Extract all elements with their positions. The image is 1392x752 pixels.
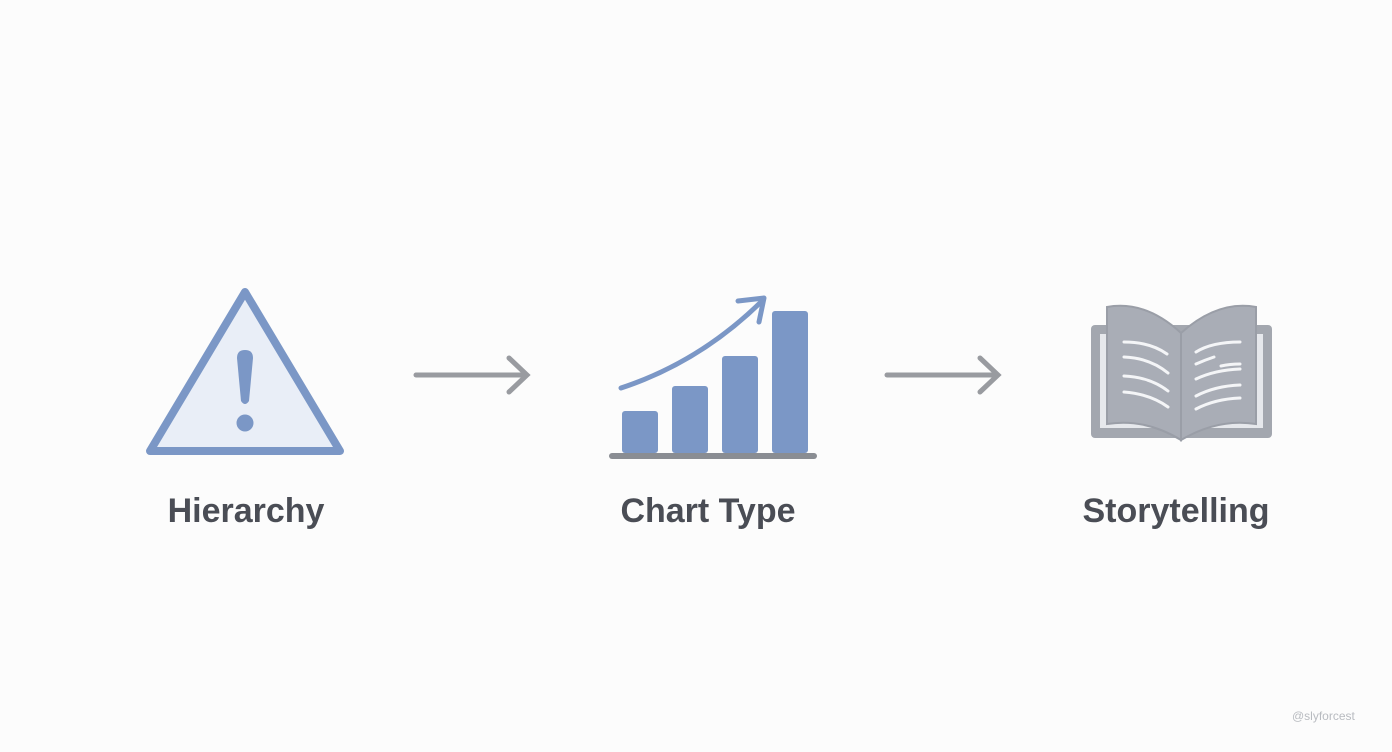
icon: warning triangle (150, 292, 340, 451)
arrow 2 (887, 358, 998, 392)
heading: Hierarchy: Hierarchy (168, 492, 325, 530)
icon: open book (1091, 306, 1272, 440)
watermark: @slyforcest (1292, 709, 1356, 723)
heading: Chart Type: Chart Type (620, 492, 796, 530)
heading: Storytelling: Storytelling (1082, 492, 1270, 530)
arrow 1 (416, 358, 527, 392)
icon: bar chart (612, 298, 814, 456)
